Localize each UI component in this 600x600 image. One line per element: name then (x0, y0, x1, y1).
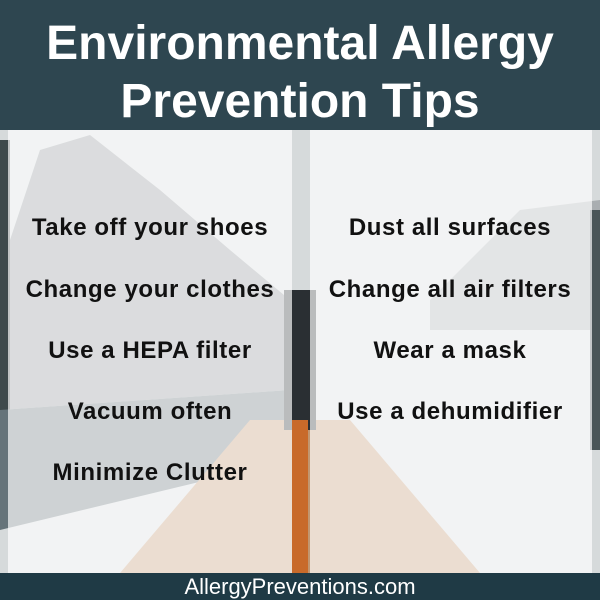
panel: right overlay (310, 130, 592, 573)
tip 2: Change your clothes (26, 276, 274, 303)
tips: right column (329, 214, 571, 425)
tip 9: Use a dehumidifier (337, 398, 563, 425)
tip 6: Dust all surfaces (349, 214, 551, 241)
tip 8: Wear a mask (374, 337, 526, 364)
header: Environmental Allergy (46, 17, 554, 70)
header (0, 0, 600, 130)
tip 7: Change all air filters (329, 276, 571, 303)
tip 5: Minimize Clutter (53, 459, 247, 486)
tips: left column (26, 214, 274, 486)
panel: left overlay (8, 130, 292, 573)
tip 1: Take off your shoes (32, 214, 268, 241)
footer (0, 573, 600, 600)
footer: AllergyPreventions.com (184, 574, 416, 599)
tip 4: Vacuum often (68, 398, 232, 425)
background photo (0, 130, 600, 573)
tip 3: Use a HEPA filter (48, 337, 252, 364)
header: Prevention Tips (120, 75, 480, 128)
